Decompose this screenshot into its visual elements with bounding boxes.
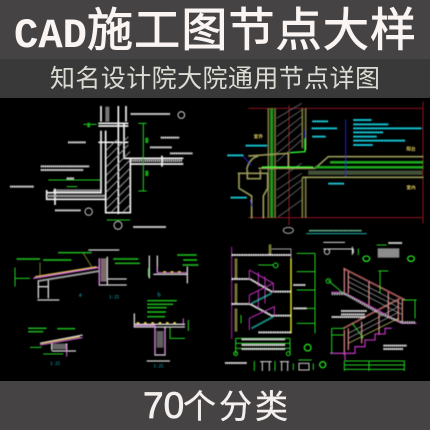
panel: sloped roof eaves details: [15, 250, 199, 370]
detail c: [40, 335, 83, 351]
footer text: 个分类: [183, 380, 288, 428]
floor slab: [247, 153, 423, 177]
detail d: [134, 313, 185, 361]
title text: CAD: [14, 12, 87, 60]
panel: sloped roof eaves details: b: [158, 293, 161, 299]
small section details at bottom: [225, 360, 247, 366]
title banner: [0, 0, 430, 60]
subtitle banner: [0, 59, 430, 98]
panel: sloped roof eaves details: 1: 25: [153, 365, 164, 370]
panel: balcony drain detail: 阳台: [406, 146, 416, 153]
stair perspective upper flight: [343, 268, 405, 328]
stair section: [230, 247, 233, 339]
panel: balcony drain detail: 室外: [254, 133, 263, 140]
footer banner: [0, 380, 430, 430]
top callouts: [323, 242, 353, 255]
panel: staircase details: [225, 242, 417, 371]
panel: balcony drain detail: [227, 102, 423, 234]
detail b: [149, 256, 187, 283]
panel: sloped roof eaves details: 1: 25: [109, 295, 120, 300]
hatched wall: [268, 108, 306, 218]
panel: sloped roof eaves details: 1: 25: [50, 362, 61, 367]
hatch fill: [107, 137, 130, 212]
annotation labels: [10, 114, 193, 227]
dimension lines: [48, 123, 147, 220]
panel: sloped roof eaves details: a: [79, 292, 82, 298]
panel: wall section detail: [10, 106, 193, 229]
annotations: [243, 119, 346, 207]
footer number: 70: [143, 385, 184, 426]
stair perspective lower flight: [344, 300, 398, 355]
detail a: [37, 250, 127, 300]
drain pipe: [238, 170, 268, 218]
subtitle text: 知名设计院大院通用节点详图: [50, 59, 380, 95]
panel: balcony drain detail: 室内: [406, 184, 416, 191]
